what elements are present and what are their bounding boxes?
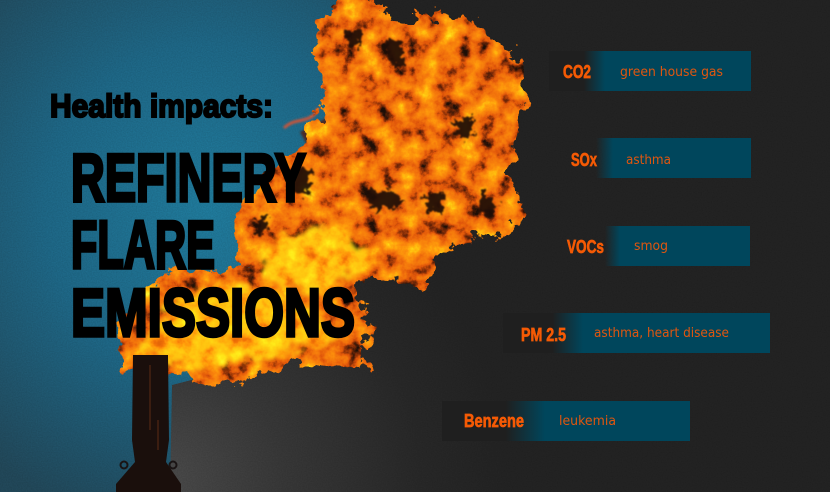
row: Benzene: Benzene [464, 411, 524, 431]
row: SOx [571, 138, 751, 178]
flame yellow core [140, 222, 375, 368]
subtitle: Health impacts: [50, 88, 273, 124]
row: Benzene [442, 401, 690, 441]
row: PM 2.5: asthma, heart disease [594, 326, 729, 341]
flare fireball [118, 0, 528, 386]
row: VOCs [567, 226, 750, 266]
row: SOx: SOx [571, 150, 597, 170]
heading line 1: REFINERY [71, 140, 306, 216]
flare stack [116, 355, 181, 492]
background: teal sky [0, 0, 350, 492]
heading line 3: EMISSIONS [71, 275, 355, 351]
flame soot patches [254, 28, 500, 234]
row: SOx: asthma [626, 153, 671, 168]
stack rust highlights [150, 365, 158, 450]
title block [50, 88, 355, 351]
row: CO2: CO2 [563, 62, 591, 82]
row: CO2: green house gas [620, 65, 723, 80]
row: PM 2.5: PM 2.5 [521, 325, 566, 345]
stack side handles [120, 462, 176, 468]
row: VOCs: VOCs [567, 237, 604, 257]
row: PM 2.5 [503, 313, 770, 353]
stack column [116, 355, 181, 492]
row: CO2 [549, 51, 751, 91]
flame body [118, 0, 528, 386]
row: Benzene: leukemia [559, 414, 616, 429]
flame wisps [284, 108, 345, 150]
row: VOCs: smog [634, 239, 668, 254]
heading line 2: FLARE [71, 207, 215, 283]
